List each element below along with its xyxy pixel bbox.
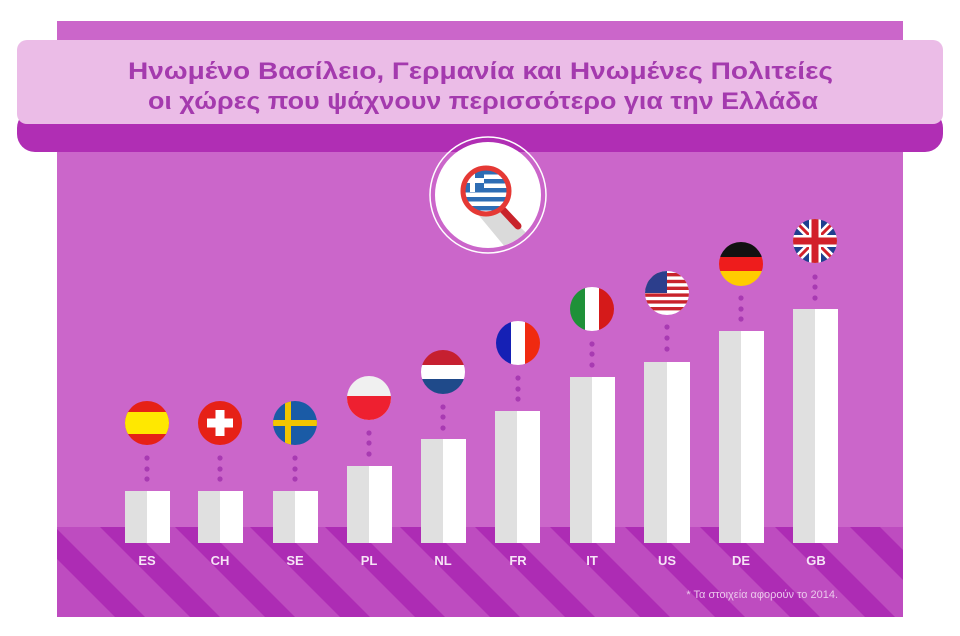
icon: flag FR — [496, 321, 540, 365]
footnote: * Τα στοιχεία αφορούν το 2014. — [686, 589, 838, 601]
icon: flag DE — [719, 242, 763, 286]
icon: flag GB — [793, 219, 837, 263]
icon: flag IT — [570, 287, 614, 331]
title banner: οι χώρες που ψάχνουν περισσότερο για την Ελλάδα — [148, 88, 818, 115]
bar: SE — [273, 491, 318, 543]
title banner: Ηνωμένο Βασίλειο, Γερμανία και Ηνωμένες Πολιτείες — [128, 58, 833, 85]
dotted connectors — [144, 274, 818, 482]
bar: FR — [495, 411, 540, 543]
icon: magnifier over Greek flag — [429, 136, 547, 254]
bar: GB — [793, 309, 838, 543]
country labels: CH — [211, 553, 229, 568]
country labels: IT — [586, 553, 598, 568]
bar: ES — [125, 491, 170, 543]
country labels: PL — [361, 553, 377, 568]
icon: flag ES — [125, 401, 169, 445]
icon: flag CH — [198, 401, 242, 445]
icon: flag US — [645, 271, 689, 315]
country labels: SE — [286, 553, 304, 568]
icon: flag PL — [347, 376, 391, 420]
country labels: ES — [138, 553, 156, 568]
country labels: NL — [434, 553, 452, 568]
icon: flag SE — [273, 401, 317, 445]
bar: US — [644, 362, 690, 543]
bar chart — [125, 309, 838, 543]
bar: CH — [198, 491, 243, 543]
title banner — [17, 40, 943, 152]
country labels: US — [658, 553, 676, 568]
icon: flag NL — [421, 350, 465, 394]
bar: IT — [570, 377, 615, 543]
country labels — [138, 553, 826, 568]
bar: NL — [421, 439, 466, 543]
country labels: GB — [806, 553, 826, 568]
country labels: FR — [509, 553, 527, 568]
bar: DE — [719, 331, 764, 543]
country labels: DE — [732, 553, 750, 568]
bar: PL — [347, 466, 392, 543]
